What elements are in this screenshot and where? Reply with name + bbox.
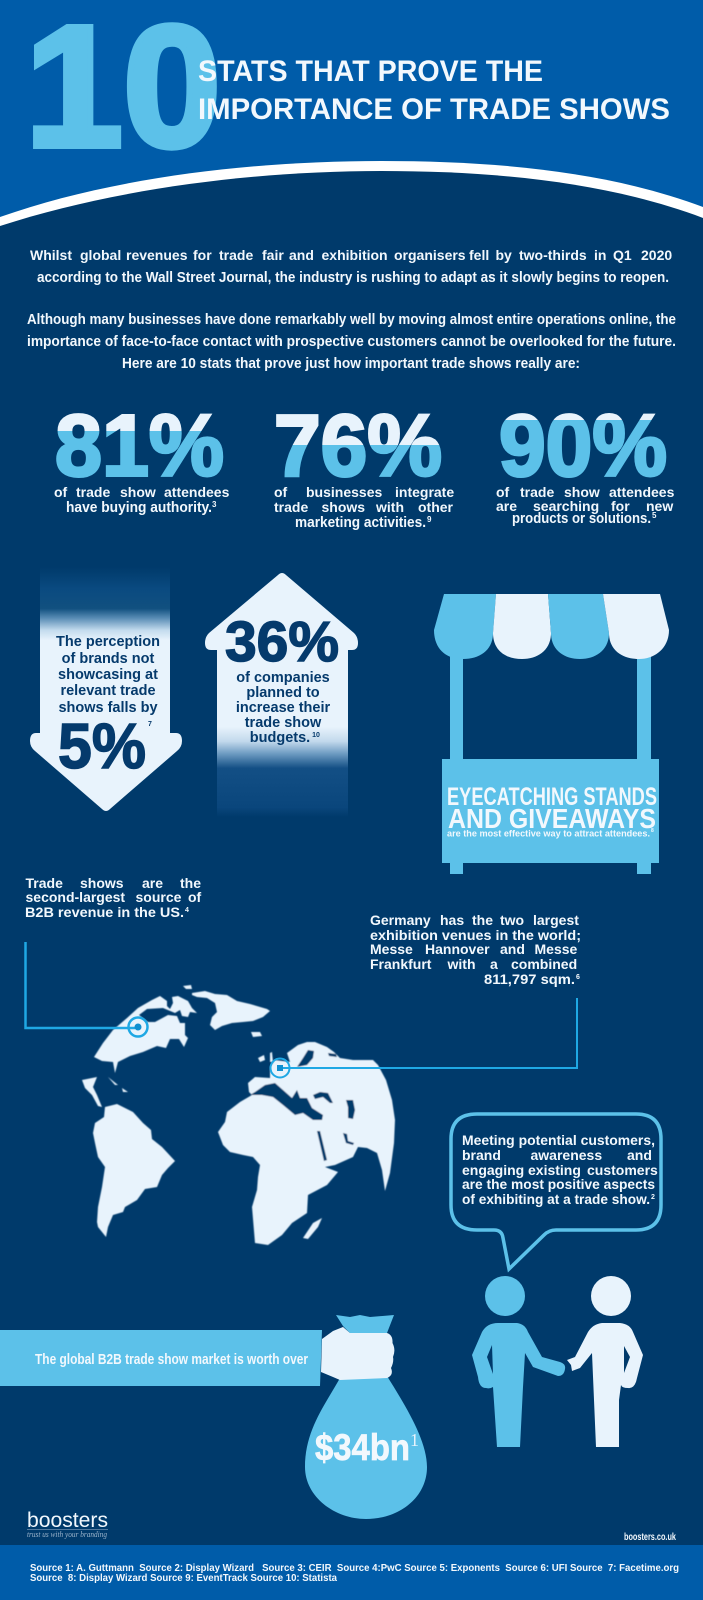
stat: 90%: show — [564, 484, 600, 500]
stat: 90%: are — [496, 498, 517, 514]
footer sources — [0, 1545, 703, 1600]
intro text: in — [594, 247, 606, 263]
Africa and Eurasia — [218, 1042, 395, 1245]
up arrow text: budgets. — [250, 730, 310, 746]
up arrow text: planned to — [246, 685, 320, 701]
text: Germany venues: Germany — [370, 912, 431, 928]
stat: 90%: of — [496, 484, 510, 500]
intro text: 2020 — [641, 247, 672, 263]
bubble text — [462, 1132, 658, 1207]
South America — [93, 1104, 175, 1237]
text: US revenue: 4 — [185, 907, 189, 914]
text: Germany venues: Messe — [370, 941, 413, 957]
text: Germany venues: and — [500, 941, 525, 957]
bubble text: customers — [587, 1162, 658, 1178]
text: US revenue: the — [180, 875, 201, 891]
down arrow text: of brands not — [62, 651, 154, 667]
down arrow text: showcasing at — [58, 667, 158, 683]
36% figure: 36% — [225, 610, 339, 674]
text: US revenue: Trade — [26, 875, 63, 891]
bubble text: and — [627, 1147, 652, 1163]
stall text: AND GIVEAWAYS — [448, 803, 656, 834]
footer sources: Source 8: Display Wizard Source 9: EventTrack Source 10: Statista — [30, 1573, 337, 1584]
up arrow text: trade show — [245, 715, 322, 731]
stat: 90%: 90% — [499, 398, 667, 494]
5% figure: 7 — [148, 721, 152, 728]
text: Germany venues: 811,797 sqm. — [484, 971, 575, 987]
stat: 76%: 9 — [427, 515, 432, 524]
down arrow text: shows falls by — [58, 700, 158, 716]
stat: 76%: trade — [274, 499, 308, 515]
intro text: for — [193, 247, 212, 263]
down arrow text — [56, 634, 160, 716]
stat: 90%: products or solutions. — [512, 511, 651, 527]
stat: 81%: of — [54, 484, 68, 500]
down arrow panel — [30, 567, 182, 811]
$34bn value: 1 — [410, 1430, 419, 1450]
up arrow panel — [205, 573, 358, 817]
stat: 81%: trade — [76, 484, 110, 500]
intro text: global — [80, 247, 121, 263]
Iceland — [251, 1032, 262, 1037]
person left — [472, 1276, 565, 1447]
intro text: trade — [219, 247, 253, 263]
stat: 76%: shows — [322, 499, 365, 515]
intro text: by — [496, 247, 512, 263]
person right — [567, 1276, 643, 1447]
bubble text: are the most positive aspects — [462, 1176, 655, 1192]
stall posts and feet — [450, 650, 651, 874]
title — [198, 55, 670, 126]
text: Germany venues: a — [490, 956, 498, 972]
bubble text: 2 — [651, 1194, 655, 1201]
bubble text: of exhibiting at a trade show. — [462, 1191, 650, 1207]
bubble text: engaging — [462, 1162, 524, 1178]
intro text: according to the Wall Street Journal, the industry is rushing to adapt as it slowly begins to reopen. — [37, 270, 669, 286]
text: Germany venues: largest — [533, 912, 579, 928]
text: Germany venues: combined — [511, 956, 577, 972]
text: Germany venues: Messe — [534, 941, 578, 957]
text: US revenue: source — [136, 889, 182, 905]
text: US revenue: shows — [80, 875, 124, 891]
connector: Germany — [270, 998, 577, 1078]
intro text: exhibition — [322, 247, 388, 263]
stall text — [447, 783, 657, 840]
up arrow text: increase their — [236, 700, 331, 716]
intro text: revenues — [126, 247, 188, 263]
logo: boosters — [27, 1509, 108, 1532]
text: Germany venues: has — [440, 912, 464, 928]
world map — [82, 985, 395, 1245]
stall text: 8 — [651, 828, 654, 834]
text: Germany venues: with — [446, 956, 476, 972]
sleeve with market text — [0, 1330, 322, 1386]
intro text — [27, 247, 676, 372]
market stall — [434, 594, 669, 874]
seas — [250, 1050, 355, 1161]
up arrow text: of companies — [236, 670, 330, 686]
stat: 81%: attendees — [164, 484, 230, 500]
text: US revenue: are — [142, 875, 163, 891]
bubble text: existing — [528, 1162, 581, 1178]
intro text: organisers — [394, 247, 466, 263]
intro text: fell — [469, 247, 489, 263]
website: boosters.co.uk — [624, 1532, 676, 1543]
Central America and Caribbean — [82, 1077, 102, 1107]
text: Germany venues: exhibition venues in the world; — [370, 927, 581, 943]
intro text: Whilst — [30, 247, 72, 263]
speech bubble — [451, 1114, 661, 1269]
connector: USA — [26, 942, 148, 1036]
intro text: importance of face-to-face contact with prospective customers cannot be overlooked for the future. — [27, 334, 676, 350]
text: US revenue: second-largest — [26, 889, 125, 905]
up arrow text: 10 — [312, 732, 320, 739]
stat: 76%: 76% — [274, 398, 442, 494]
stall awning — [434, 594, 669, 659]
text: Germany venues: Frankfurt — [370, 956, 432, 972]
stat: 90%: attendees — [609, 484, 675, 500]
intro text: two-thirds — [519, 247, 587, 263]
stat: 90%: for — [611, 498, 630, 514]
fist — [321, 1327, 394, 1380]
down arrow text: relevant trade — [60, 683, 156, 699]
up arrow text — [236, 670, 331, 746]
title: IMPORTANCE OF TRADE SHOWS — [198, 93, 670, 126]
text: Germany venues: 6 — [576, 974, 580, 981]
5% figure: 5% — [58, 710, 146, 782]
text: US revenue: B2B revenue in the US. — [25, 904, 184, 920]
North America — [94, 996, 197, 1073]
intro text: Q1 — [613, 247, 632, 263]
text: US revenue — [25, 875, 202, 920]
stat: 76%: of — [274, 484, 288, 500]
bubble text: brand — [462, 1147, 501, 1163]
bubble text: Meeting potential customers, — [462, 1132, 655, 1148]
text: Germany venues — [370, 912, 581, 987]
footer sources: Source 1: A. Guttmann Source 2: Display Wizard Source 3: CEIR Source 4:PwC Source 5: Exponents Source 6: UFI Source 7: Facetime.org — [30, 1563, 679, 1574]
stat: 76%: businesses — [306, 484, 382, 500]
stat: 76%: integrate — [395, 484, 454, 500]
Great Britain and Ireland — [258, 1055, 265, 1062]
stat: 81%: 81% — [55, 398, 224, 494]
stat: 76%: marketing activities. — [295, 515, 426, 531]
stat: 90%: 5 — [652, 511, 657, 520]
logo: trust us with your branding — [27, 1529, 107, 1539]
intro text: and — [289, 247, 314, 263]
intro text: Here are 10 stats that prove just how important trade shows really are: — [122, 356, 580, 372]
$34bn value: $34bn — [315, 1427, 410, 1468]
stall text: are the most effective way to attract attendees. — [447, 828, 650, 840]
Madagascar — [303, 1218, 322, 1239]
Greenland — [192, 991, 270, 1030]
stat: 90%: new — [646, 498, 673, 514]
text: Germany venues: two — [500, 912, 524, 928]
text: US revenue: of — [188, 889, 202, 905]
stat: 90%: searching — [533, 498, 599, 514]
intro text: fair — [262, 247, 284, 263]
text: Germany venues: Hannover — [425, 941, 490, 957]
stat: 76%: with — [375, 499, 404, 515]
header band — [0, 0, 703, 240]
stat: 81%: show — [120, 484, 156, 500]
stall counter — [442, 759, 659, 863]
text: Germany venues: the — [472, 912, 493, 928]
stat: 81%: have buying authority. — [66, 500, 212, 516]
bubble text: awareness — [530, 1147, 602, 1163]
stat: 90%: trade — [520, 484, 554, 500]
stat: 81%: 3 — [212, 500, 217, 509]
title: STATS THAT PROVE THE — [198, 55, 543, 88]
sleeve with market text: The global B2B trade show market is worth over — [35, 1352, 308, 1368]
down arrow text: The perception — [56, 634, 160, 650]
stat: 76%: other — [418, 499, 454, 515]
money bag — [305, 1315, 427, 1519]
